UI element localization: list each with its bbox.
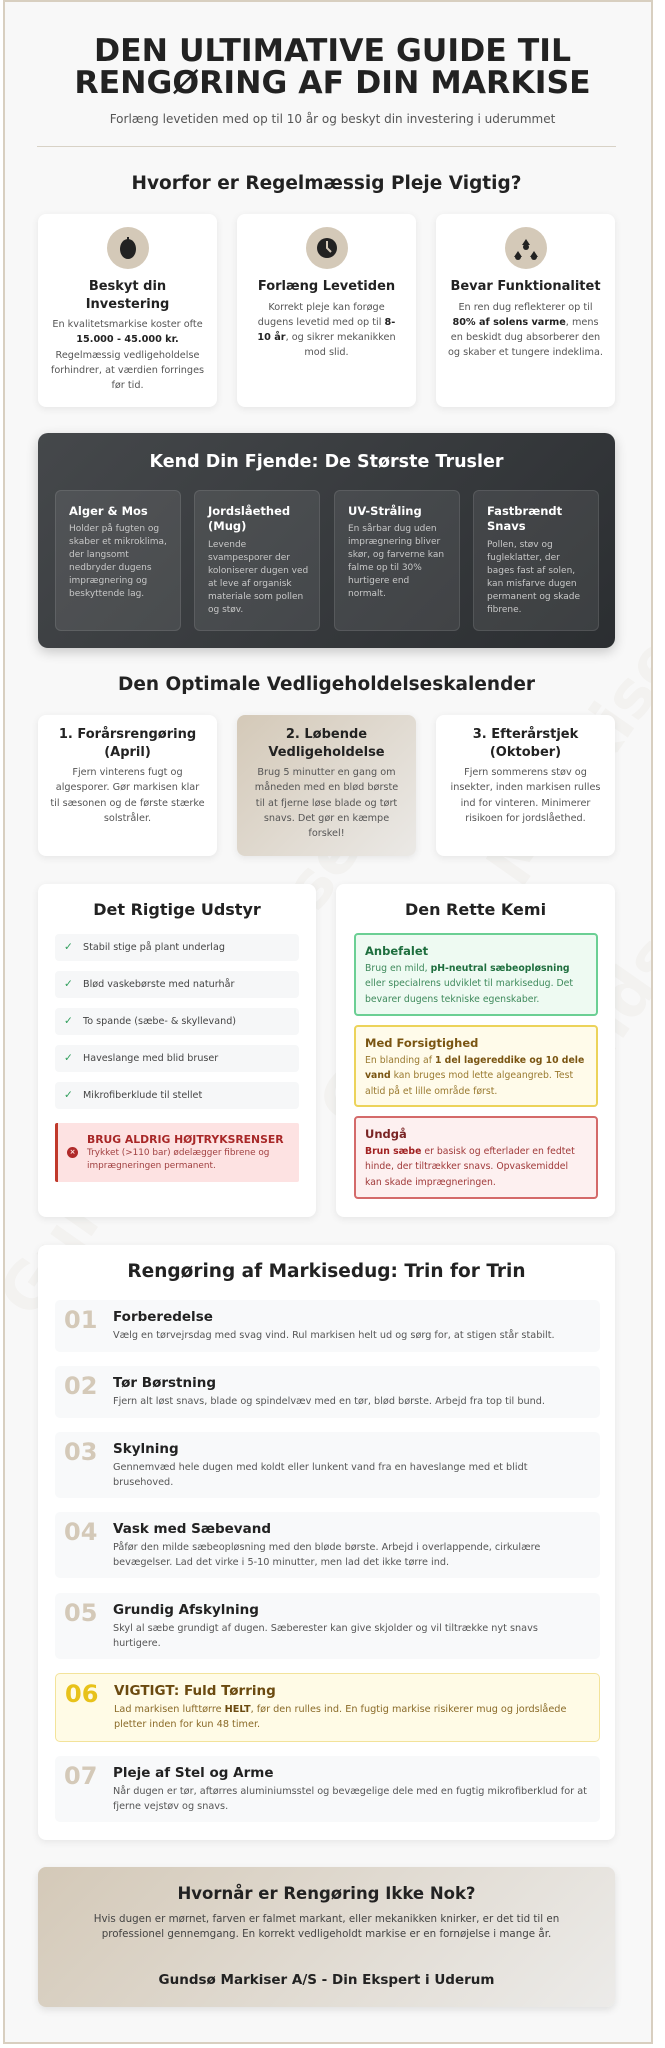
panel: chemistry xyxy=(336,884,615,1217)
threat: alger xyxy=(55,490,181,631)
list: equipment: Blød vaskebørste med naturhår xyxy=(83,979,234,990)
heading: steps: Rengøring af Markisedug: Trin for Trin xyxy=(127,1261,526,1282)
card: autumn xyxy=(436,715,615,856)
card: spring: Fjern vinterens fugt og algesporer. Gør markisen klar til sæsonen og de første stærke solstråler. xyxy=(50,767,205,824)
icon: shield xyxy=(106,227,148,269)
callout: no pressure washer: BRUG ALDRIG HØJTRYKSRENSER xyxy=(87,1133,284,1146)
card: function: Bevar Funktionalitet xyxy=(450,279,601,294)
box: avoid: Brun sæbe er basisk og efterlader en fedtet hinde, der tiltrækker snavs. Opvaskemiddel kan skade imprægneringen. xyxy=(365,1146,575,1188)
card: function xyxy=(436,214,615,407)
icon: stop: × xyxy=(70,1148,75,1156)
card: ongoing xyxy=(237,715,416,856)
list: equipment: Mikrofiberklude til stellet xyxy=(83,1090,202,1101)
step 04: Påfør den milde sæbeopløsning med den bløde børste. Arbejd i overlappende, cirkulære bevægelser. Lad det virke i 5-10 minutter, men lad det ikke tørre ind. xyxy=(113,1542,540,1568)
title: RENGØRING AF DIN MARKISE xyxy=(74,65,591,101)
heading: threats: Kend Din Fjende: De Største Trusler xyxy=(150,452,503,472)
card: lifetime xyxy=(237,214,416,407)
panel: why cards xyxy=(38,226,616,410)
threat: alger: Holder på fugten og skaber et mikroklima, der langsomt nedbryder dugens imprægnering og beskyttende lag. xyxy=(69,524,167,599)
step 05: 05 xyxy=(64,1599,97,1627)
box: avoid xyxy=(354,1116,598,1199)
card: lifetime: Korrekt pleje kan forøge dugens levetid med op til 8-10 år, og sikrer mekanikken mod slid. xyxy=(257,302,396,358)
card: invest: Investering xyxy=(86,296,169,312)
threat: snavs xyxy=(473,490,599,631)
threat: snavs: Fastbrændt Snavs xyxy=(487,504,562,533)
list: equipment: Haveslange med blid bruser xyxy=(83,1053,218,1064)
heading: calendar: Den Optimale Vedligeholdelseskalender xyxy=(118,674,535,695)
step 05: Grundig Afskylning xyxy=(113,1602,259,1618)
step 03: Skylning xyxy=(113,1441,179,1457)
threat: uv xyxy=(334,490,460,631)
step 07: Når dugen er tør, aftørres aluminiumsstel og bevægelige dele med en fugtig mikrofiberklud for at fjerne vejstøv og snavs. xyxy=(113,1786,587,1812)
step 04: Vask med Sæbevand xyxy=(113,1521,271,1537)
step 02: 02 xyxy=(64,1372,97,1400)
step 06: VIGTIGT: Fuld Tørring xyxy=(114,1683,276,1699)
panel: footer xyxy=(38,1867,615,2007)
step 06 xyxy=(55,1673,600,1742)
list: equipment xyxy=(55,934,299,1109)
title xyxy=(74,33,591,101)
list: equipment: ✓ xyxy=(64,978,73,990)
step 03: Gennemvæd hele dugen med koldt eller lunkent vand fra en haveslange med et blidt brusehoved. xyxy=(113,1462,528,1488)
list: equipment: ✓ xyxy=(64,1089,73,1101)
icon: stop xyxy=(67,1147,78,1158)
threat: mug xyxy=(194,490,320,631)
signature: Gundsø Markiser A/S - Din Ekspert i Uderum xyxy=(159,1972,494,1988)
heading: why: Hvorfor er Regelmæssig Pleje Vigtig? xyxy=(132,173,521,194)
step 01: Forberedelse xyxy=(113,1309,213,1325)
box: recommended: Brug en mild, pH-neutral sæbeopløsning eller specialrens udviklet til markisedug. Det bevarer dugens tekniske egenskaber. xyxy=(365,963,573,1005)
threat: uv: En sårbar dug uden imprægnering bliver skør, og farverne kan falme op til 30% hurtigere end normalt. xyxy=(348,524,444,599)
step 03: 03 xyxy=(64,1438,97,1466)
heading: footer: Hvornår er Rengøring Ikke Nok? xyxy=(177,1884,476,1903)
card: invest: En kvalitetsmarkise koster ofte 15.000 - 45.000 kr. Regelmæssig vedligeholdelse forhindrer, at værdien forringes før tid. xyxy=(51,319,204,391)
step 05: Skyl al sæbe grundigt af dugen. Sæberester kan give skjolder og vil tiltrække nyt snavs hurtigere. xyxy=(113,1623,538,1649)
step 06: 06 xyxy=(65,1680,98,1708)
callout: no pressure washer: Trykket (>110 bar) ødelægger fibrene og imprægneringen permanent. xyxy=(87,1148,269,1171)
icon: recycle xyxy=(504,227,546,269)
subtitle: Forlæng levetiden med op til 10 år og beskyt din investering i uderummet xyxy=(110,112,555,126)
box: caution xyxy=(354,1025,598,1107)
step 02 xyxy=(55,1366,600,1418)
card: invest xyxy=(38,214,217,407)
list: equipment: ✓ xyxy=(64,1015,73,1027)
threat: uv: UV-Stråling xyxy=(348,504,422,518)
list: equipment: ✓ xyxy=(64,1052,73,1064)
box: caution: Med Forsigtighed xyxy=(365,1036,478,1050)
card: spring xyxy=(38,715,217,856)
box: avoid: Undgå xyxy=(365,1127,407,1141)
panel: equipment xyxy=(38,884,316,1217)
text: footer: Hvis dugen er mørnet, farven er falmet markant, eller mekanikken knirker, er det tid til en professionel gennemgang. En korrekt vedligeholdt markise er en fornøjelse i mange år. xyxy=(94,1913,559,1940)
card: lifetime: Forlæng Levetiden xyxy=(258,279,395,294)
list: equipment: Stabil stige på plant underlag xyxy=(83,942,225,953)
box: recommended: Anbefalet xyxy=(365,944,428,958)
callout: no pressure washer xyxy=(55,1123,299,1182)
threat: mug: Levende svampesporer der koloniserer dugen ved at leve af organisk materiale som pollen og støv. xyxy=(208,540,308,615)
list: equipment: To spande (sæbe- & skyllevand) xyxy=(83,1016,236,1027)
threat: snavs: Pollen, støv og fugleklatter, der bages fast af solen, kan misfarve dugen permanent og skade fibrene. xyxy=(487,540,580,615)
step 04: 04 xyxy=(64,1518,97,1546)
step 01: 01 xyxy=(64,1306,97,1334)
step 02: Fjern alt løst snavs, blade og spindelvæv med en tør, blød børste. Arbejd fra top til bund. xyxy=(113,1396,545,1407)
threat: alger: Alger & Mos xyxy=(69,504,148,518)
step 03 xyxy=(55,1432,600,1498)
step 05 xyxy=(55,1593,600,1659)
card: ongoing: Brug 5 minutter en gang om måneden med en blød børste til at fjerne løse blade og tørt snavs. Det gør en kæmpe forskel! xyxy=(255,767,398,839)
panel: steps xyxy=(38,1245,615,1840)
icon: clock xyxy=(306,227,348,269)
step 02: Tør Børstning xyxy=(113,1375,216,1391)
step 07 xyxy=(55,1756,600,1822)
card: spring: 1. Forårsrengøring (April) xyxy=(59,727,196,760)
list: equipment: ✓ xyxy=(64,941,73,953)
card: ongoing: 2. Løbende Vedligeholdelse xyxy=(268,727,385,760)
step 06: Lad markisen lufttørre HELT, før den rulles ind. En fugtig markise risikerer mug og jordslåede pletter inden for kun 48 timer. xyxy=(114,1704,566,1730)
card: function: En ren dug reflekterer op til 80% af solens varme, mens en beskidt dug absorberer den og skaber et tungere indeklima. xyxy=(448,302,603,358)
heading: equipment: Det Rigtige Udstyr xyxy=(93,900,261,919)
card: autumn: 3. Efterårstjek (Oktober) xyxy=(473,727,578,760)
threat: mug: Jordslåethed (Mug) xyxy=(208,504,290,533)
step 01 xyxy=(55,1300,600,1352)
box: caution: En blanding af 1 del lagereddike og 10 dele vand kan bruges mod lette algeangreb. Test altid på et lille område først. xyxy=(365,1055,584,1097)
heading: chemistry: Den Rette Kemi xyxy=(405,900,546,919)
box: recommended xyxy=(354,933,598,1016)
card: autumn: Fjern sommerens støv og insekter, inden markisen rulles ind for vinteren. Minimerer risikoen for jordslåethed. xyxy=(451,767,600,824)
step 04 xyxy=(55,1512,600,1578)
step 07: 07 xyxy=(64,1762,97,1790)
title: DEN ULTIMATIVE GUIDE TIL xyxy=(94,33,571,69)
card: invest: Beskyt din xyxy=(89,279,166,294)
step 07: Pleje af Stel og Arme xyxy=(113,1765,273,1781)
panel: threats xyxy=(38,433,615,648)
step 01: Vælg en tørvejrsdag med svag vind. Rul markisen helt ud og sørg for, at stigen står stabilt. xyxy=(113,1330,555,1341)
